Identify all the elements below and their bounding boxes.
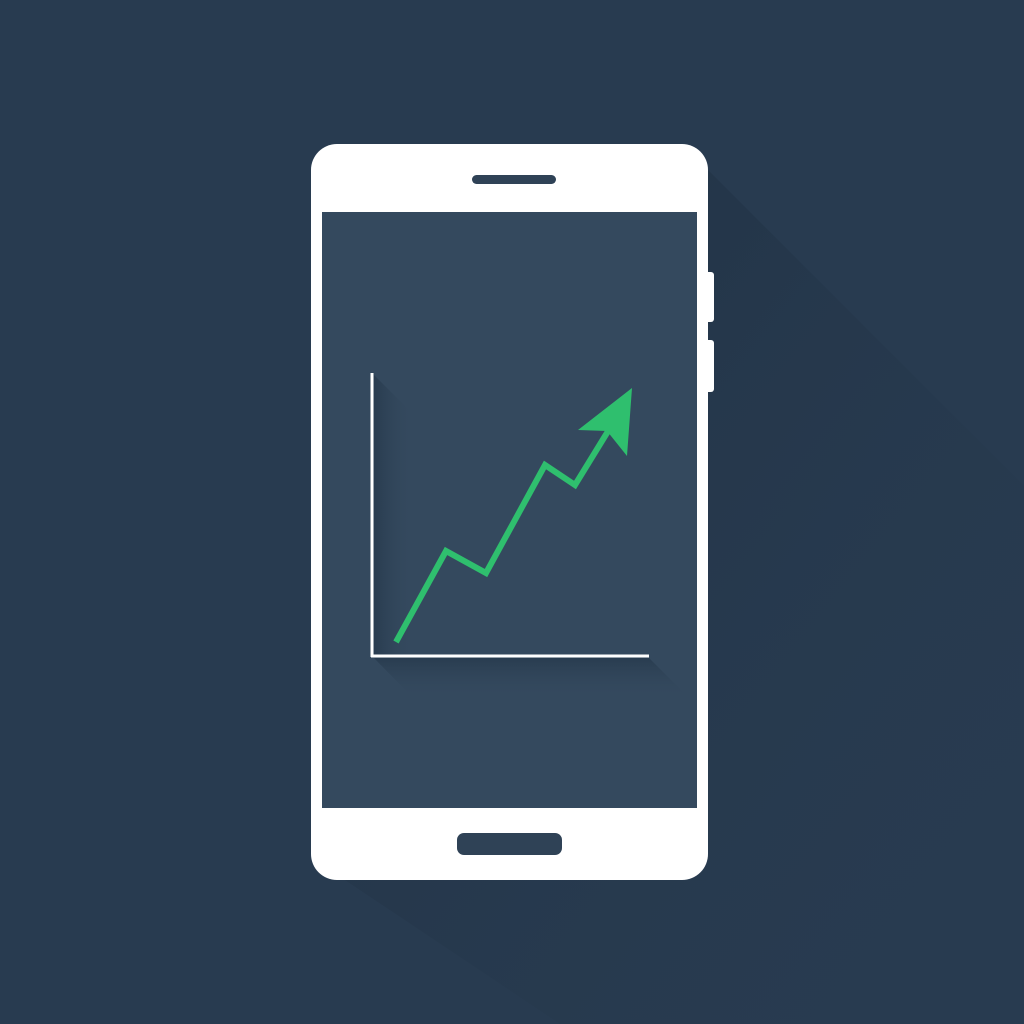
growth arrow bbox=[396, 388, 632, 642]
home button bbox=[457, 833, 562, 855]
chart axes bbox=[371, 373, 649, 657]
side buttons bbox=[704, 272, 714, 392]
phone body bbox=[311, 144, 708, 880]
chart shadow bbox=[374, 375, 690, 699]
screen bbox=[322, 212, 697, 808]
speaker bbox=[472, 175, 556, 184]
long shadow of phone bbox=[330, 150, 1024, 1024]
